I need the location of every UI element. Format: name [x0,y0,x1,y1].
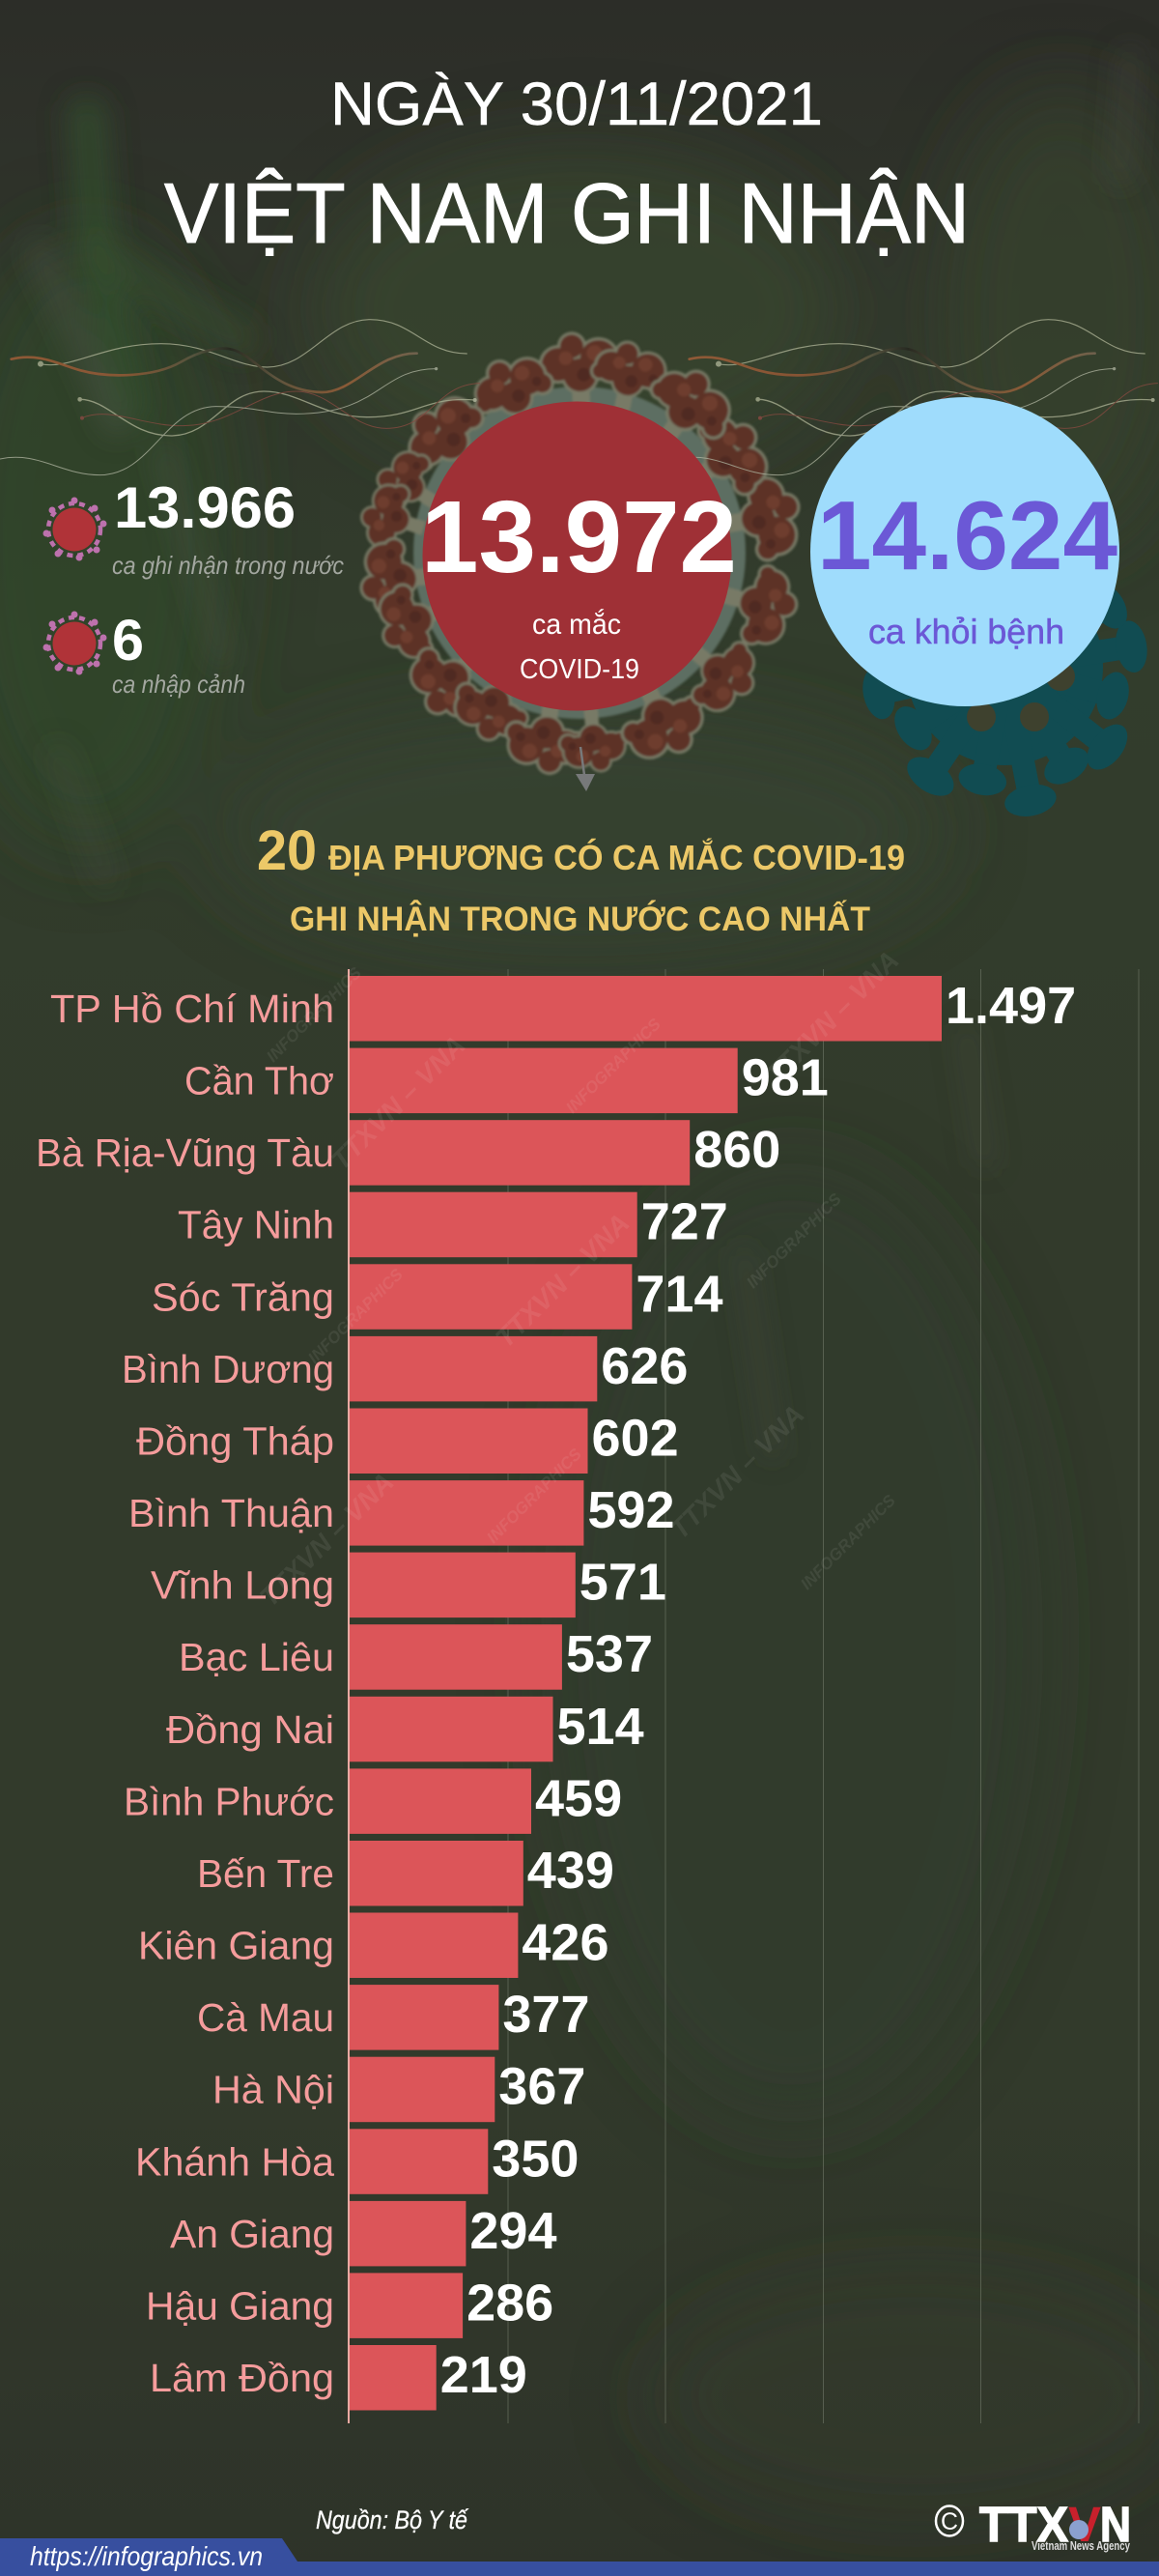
row: Vĩnh Long: Vĩnh Long [151,1563,334,1608]
chart axis [348,969,350,2423]
watermarks [254,945,905,1613]
chart heading line 1 [257,819,905,882]
row: Kiên Giang: Kiên Giang [138,1923,334,1967]
caption ca mắc: ca mắc [532,609,621,641]
row: Hà Nội: Hà Nội [212,2068,334,2112]
row: Bà Rịa-Vũng Tàu [36,1120,780,1186]
row: Kiên Giang [138,1913,609,1978]
icon: small virus [42,497,106,560]
row: Sóc Trăng [152,1264,723,1330]
watermarks: INFOGRAPHICS [797,1491,899,1593]
row: Vĩnh Long [151,1553,666,1617]
number 13.972: 13.972 [421,480,737,594]
row: Bến Tre [197,1841,614,1905]
logo: TTXVN: V [1068,2497,1101,2552]
row: Hà Nội: 367 [498,2058,585,2116]
row: Bình Phước: Bình Phước [124,1779,334,1823]
row: Bình Thuận [128,1480,675,1546]
row: Tây Ninh: Tây Ninh [178,1203,334,1247]
watermarks: INFOGRAPHICS [562,1015,664,1117]
row: Bến Tre: 439 [527,1842,614,1900]
row: Đồng Nai: Đồng Nai [166,1707,334,1752]
row: Cà Mau: Cà Mau [197,1995,334,2040]
watermarks: TTXVN – VNA [254,1467,400,1613]
watermarks: TTXVN – VNA [325,1030,471,1176]
row: Bình Phước: 459 [535,1769,622,1827]
caption imported: ca nhập cảnh [112,670,245,699]
row: TP Hồ Chí Minh: TP Hồ Chí Minh [50,987,334,1031]
row: Bình Dương [122,1336,688,1401]
row: Lâm Đồng: Lâm Đồng [150,2356,334,2400]
logo: TTXVN [936,2497,1131,2553]
number 13.966: 13.966 [114,475,296,540]
row: Bạc Liêu: Bạc Liêu [179,1635,334,1679]
row: Khánh Hòa: Khánh Hòa [135,2139,334,2184]
caption domestic: ca ghi nhận trong nước [112,551,344,580]
footer bar with url [0,2538,1159,2576]
decorative waves left [0,320,480,475]
row: Bình Thuận: 592 [587,1481,675,1539]
watermarks: INFOGRAPHICS [304,1265,407,1367]
watermarks: TTXVN – VNA [759,945,905,1091]
url: https://infographics.vn [30,2541,263,2571]
row: Lâm Đồng: 219 [440,2346,527,2404]
row: Hậu Giang [146,2273,553,2338]
row: Đồng Tháp [136,1409,679,1474]
stat: imported cases [42,608,245,699]
row: An Giang [170,2201,557,2266]
row: Đồng Tháp: Đồng Tháp [136,1418,334,1463]
logo: TTXVN: TTX [979,2497,1068,2552]
stat: domestic cases [42,475,344,580]
caption ca khỏi bệnh: ca khỏi bệnh [868,612,1064,651]
row: Bạc Liêu: 537 [566,1625,653,1683]
logo: TTXVN: C [941,2508,958,2535]
row: Bình Phước [124,1768,622,1834]
watermarks: TTXVN – VNA [490,1208,636,1354]
row: Đồng Nai [166,1697,644,1761]
decorative waves right [678,320,1158,475]
arrow down [576,747,595,791]
row: Kiên Giang: 426 [522,1913,609,1971]
logo: TTXVN: N [1100,2497,1131,2552]
row: Vĩnh Long: 571 [580,1554,666,1612]
row: Cần Thơ: 981 [742,1049,829,1107]
row: Bạc Liêu [179,1624,653,1690]
panel: recovered circle [810,397,1119,706]
chart heading line 2: GHI NHẬN TRONG NƯỚC CAO NHẤT [290,900,870,938]
row: Đồng Tháp: 602 [591,1409,679,1467]
row: An Giang: An Giang [170,2212,334,2256]
source note: Nguồn: Bộ Y tế [316,2505,469,2534]
row: Hậu Giang: 286 [466,2274,553,2332]
row: Hà Nội [212,2057,585,2122]
row: An Giang: 294 [469,2202,557,2260]
row: Cà Mau [197,1985,590,2050]
row: TP Hồ Chí Minh [50,976,1076,1042]
row: Sóc Trăng: 714 [636,1265,723,1323]
chart heading line 1: 20 [257,819,317,882]
icon: coronavirus behind total cases [352,329,808,780]
row: Bình Dương: Bình Dương [122,1347,334,1391]
chart heading line 1: ĐỊA PHƯƠNG CÓ CA MẮC COVID-19 [328,837,905,877]
row: Bà Rịa-Vũng Tàu: 860 [693,1121,780,1179]
watermarks: INFOGRAPHICS [263,963,365,1066]
icon: small virus [42,611,106,674]
row: Tây Ninh: 727 [641,1193,728,1251]
number 6: 6 [112,608,144,673]
title main: VIỆT NAM GHI NHẬN [164,165,970,261]
logo: TTXVN: Vietnam News Agency [1032,2539,1130,2553]
row: Bà Rịa-Vũng Tàu: Bà Rịa-Vũng Tàu [36,1131,334,1175]
row: Khánh Hòa: 350 [492,2130,579,2188]
watermarks: INFOGRAPHICS [743,1189,845,1292]
row: Khánh Hòa [135,2129,579,2194]
row: Tây Ninh [178,1192,728,1257]
row: Cà Mau: 377 [502,1986,590,2044]
panel: total cases circle [421,402,737,711]
row: Bình Thuận: Bình Thuận [128,1491,334,1535]
number 14.624: 14.624 [817,482,1117,590]
row: Đồng Nai: 514 [556,1698,644,1756]
caption COVID-19: COVID-19 [520,654,639,685]
row: TP Hồ Chí Minh: 1.497 [946,977,1076,1035]
row: Sóc Trăng: Sóc Trăng [152,1274,334,1319]
row: Bình Dương: 626 [601,1337,688,1395]
row: Bến Tre: Bến Tre [197,1851,334,1896]
row: Cần Thơ [184,1048,829,1113]
row: Lâm Đồng [150,2345,527,2410]
row: Hậu Giang: Hậu Giang [146,2283,334,2328]
row: Cần Thơ: Cần Thơ [184,1059,334,1103]
bar chart [36,976,1076,2410]
watermarks: INFOGRAPHICS [483,1445,585,1547]
title date: NGÀY 30/11/2021 [330,71,823,138]
watermarks: TTXVN – VNA [664,1399,810,1545]
icon: teal virus behind recovered [859,568,1150,820]
